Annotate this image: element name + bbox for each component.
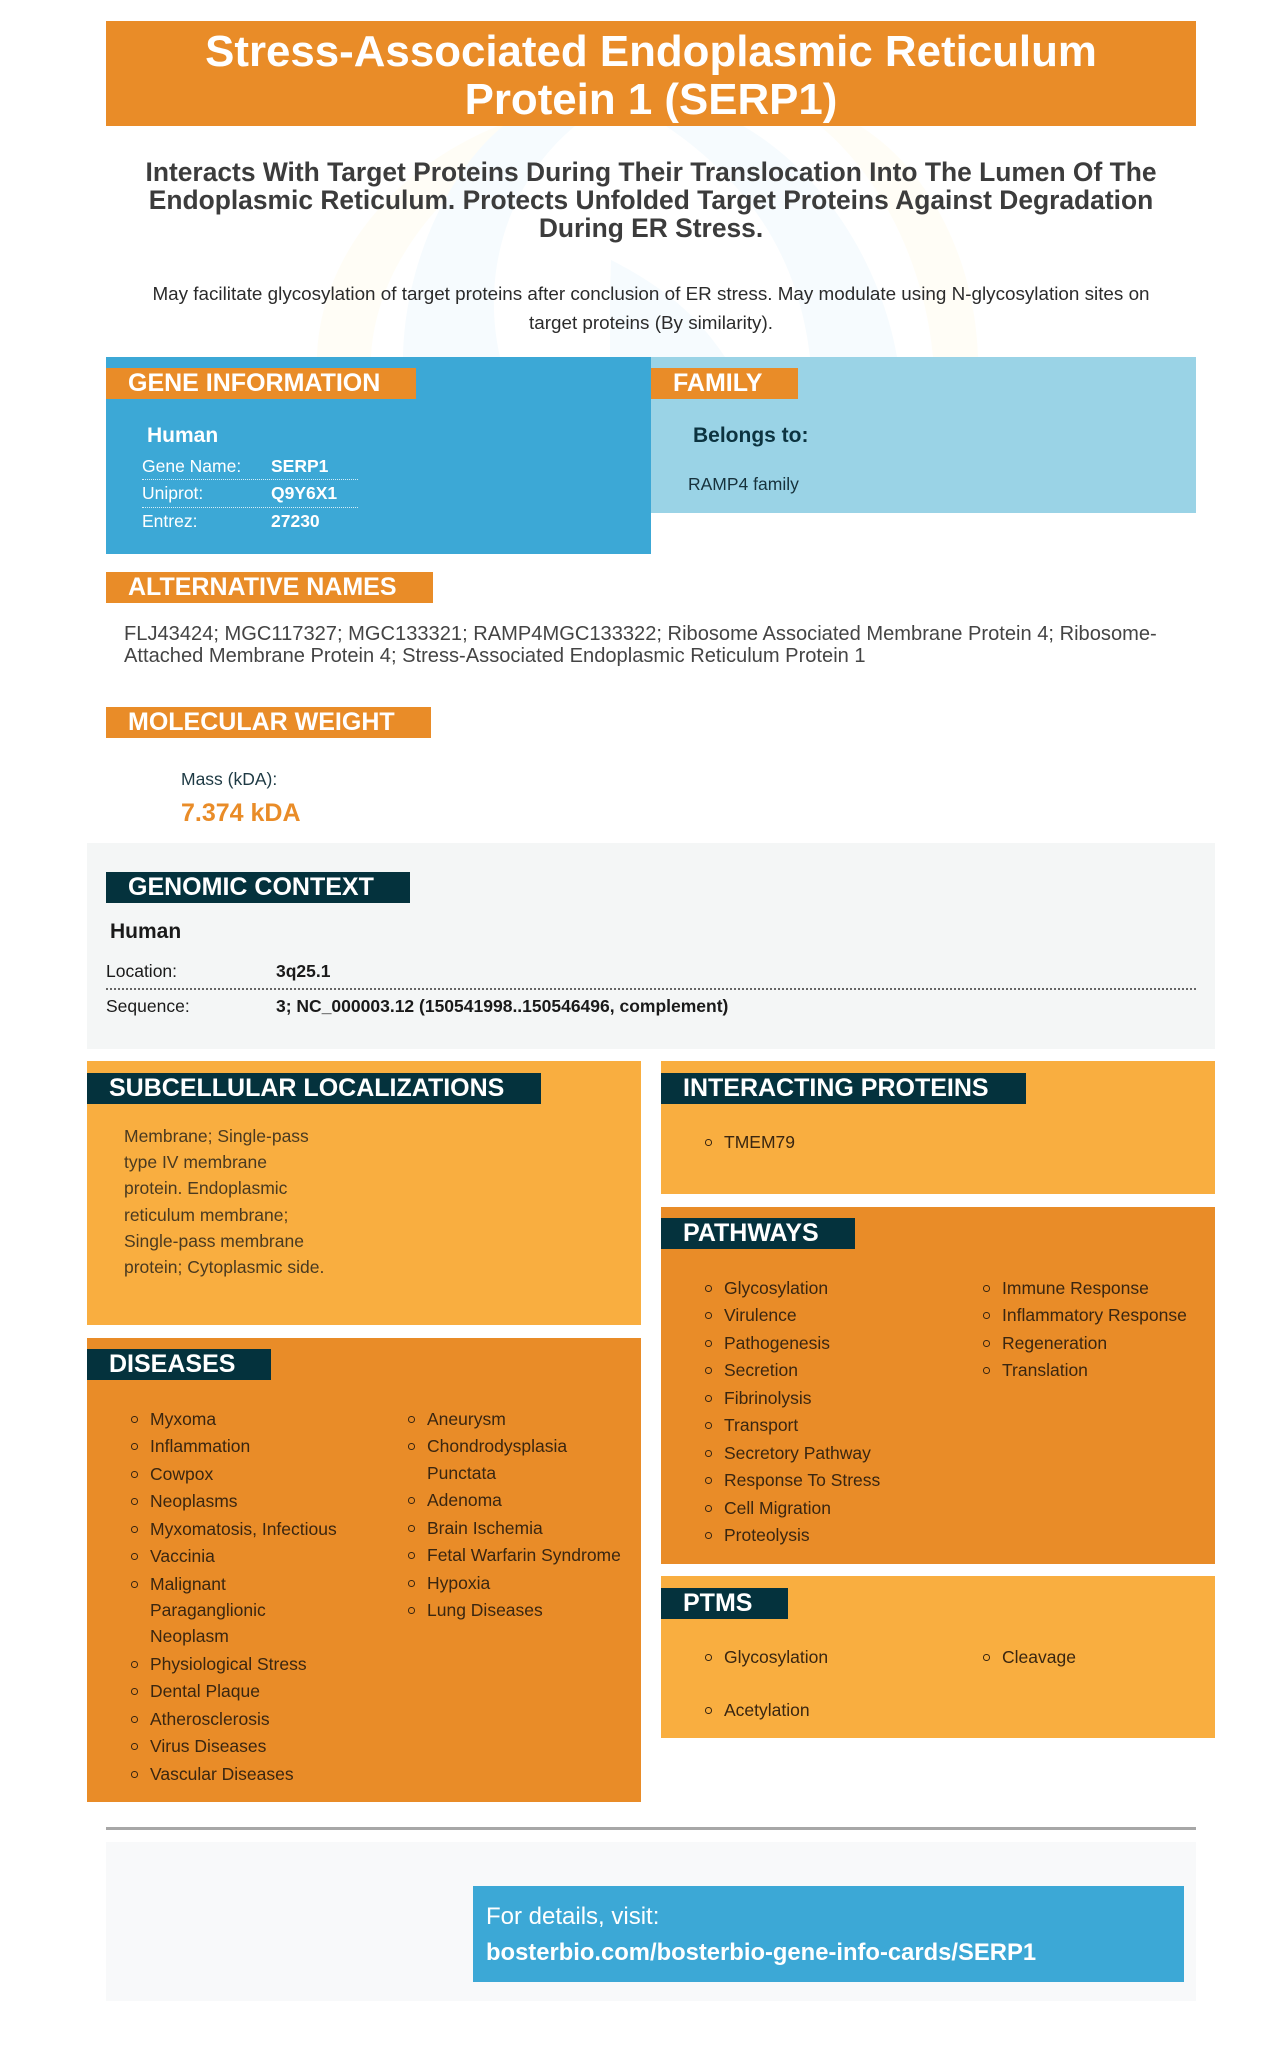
list: pathways column 1: Cell Migration <box>724 1498 831 1518</box>
localization text: reticulum membrane; <box>124 1205 288 1225</box>
list: diseases column 1: Dental Plaque <box>150 1681 260 1701</box>
list: diseases column 1: Atherosclerosis <box>150 1709 270 1729</box>
family value: RAMP4 family <box>688 474 799 494</box>
alternative names text: Attached Membrane Protein 4; Stress-Associated Endoplasmic Reticulum Protein 1 <box>124 645 866 667</box>
list item: acetylation: Acetylation <box>724 1700 810 1720</box>
list: diseases column 2: Hypoxia <box>427 1573 490 1593</box>
gene data table: Entrez: <box>142 511 197 531</box>
list: pathways column 1: Secretory Pathway <box>724 1443 871 1463</box>
heading: PTMs <box>661 1588 788 1619</box>
heading: family <box>651 368 798 399</box>
subtitle function summary: Endoplasmic Reticulum. Protects Unfolded Target Proteins Against Degradation <box>149 185 1153 215</box>
list: pathways column 1 <box>705 1278 880 1545</box>
list: pathways column 2: Inflammatory Response <box>1002 1305 1187 1325</box>
description paragraph: target proteins (By similarity). <box>529 312 773 333</box>
list: diseases column 1: Neoplasms <box>150 1491 238 1511</box>
panel: PTMs <box>661 1576 1215 1738</box>
callout intro text: For details, visit: <box>486 1903 659 1930</box>
list: pathways column 1: Response To Stress <box>724 1470 880 1490</box>
callout url: bosterbio.com/bosterbio-gene-info-cards/SERP1 <box>486 1939 1036 1966</box>
species label: Human <box>147 424 218 447</box>
location row <box>106 961 330 981</box>
panel: family <box>651 357 1196 513</box>
gene data table: Q9Y6X1 <box>271 483 337 503</box>
list: diseases column 1: Myxomatosis, Infectious <box>150 1519 337 1539</box>
background watermark logo <box>317 126 978 357</box>
heading: family: FAMILY <box>673 369 762 397</box>
list: diseases column 1: Malignant <box>150 1574 226 1594</box>
list: diseases column 1: Vascular Diseases <box>150 1764 294 1784</box>
list: diseases column 1 <box>131 1409 337 1784</box>
location row: Location: <box>106 961 177 981</box>
list item: cleavage: Cleavage <box>1002 1647 1076 1667</box>
sequence row: Sequence: <box>106 996 190 1016</box>
mass value: 7.374 kDA <box>181 799 301 827</box>
gene data table: Gene Name: <box>142 456 241 476</box>
list: diseases column 1: Virus Diseases <box>150 1736 266 1756</box>
sequence row: 3; NC_000003.12 (150541998..150546496, complement) <box>276 996 728 1016</box>
list: pathways column 1: Pathogenesis <box>724 1333 830 1353</box>
species label: Human <box>110 920 181 943</box>
heading: alternative names: ALTERNATIVE NAMES <box>128 573 397 601</box>
list item: TMEM79: TMEM79 <box>724 1132 795 1152</box>
panel: subcellular localizations <box>87 1061 641 1325</box>
title banner <box>106 21 1196 126</box>
list: diseases column 1: Myxoma <box>150 1409 216 1429</box>
list: diseases column 2 <box>408 1409 621 1620</box>
list: diseases column 2: Brain Ischemia <box>427 1518 543 1538</box>
title banner: Protein 1 (SERP1) <box>465 75 837 124</box>
panel: genomic context <box>87 843 1215 1049</box>
list: diseases column 1: Cowpox <box>150 1464 213 1484</box>
localization text: Membrane; Single-pass <box>124 1126 309 1146</box>
localization text: Single-pass membrane <box>124 1231 304 1251</box>
list: pathways column 1: Transport <box>724 1415 798 1435</box>
list: diseases column 2: Aneurysm <box>427 1409 506 1429</box>
localization text: protein; Cytoplasmic side. <box>124 1257 324 1277</box>
heading: interacting proteins: INTERACTING PROTEINS <box>683 1074 989 1102</box>
list: pathways column 2: Translation <box>1002 1360 1088 1380</box>
panel: gene information <box>106 357 651 554</box>
list: pathways column 2 <box>983 1278 1187 1380</box>
list: pathways column 1: Glycosylation <box>724 1278 828 1298</box>
heading: pathways <box>661 1218 855 1249</box>
heading: pathways: PATHWAYS <box>683 1219 819 1247</box>
list: pathways column 1: Virulence <box>724 1305 797 1325</box>
description paragraph <box>152 283 1150 333</box>
mass label: Mass (kDA): <box>181 769 277 789</box>
list: diseases column 2: Lung Diseases <box>427 1600 543 1620</box>
list: diseases column 2: Chondrodysplasia <box>427 1436 567 1456</box>
belongs to label: Belongs to: <box>693 424 808 447</box>
list: diseases column 1: Vaccinia <box>150 1546 215 1566</box>
list: pathways column 2: Immune Response <box>1002 1278 1149 1298</box>
gene data table: SERP1 <box>271 456 328 476</box>
heading: diseases: DISEASES <box>109 1350 235 1378</box>
heading: genomic context: GENOMIC CONTEXT <box>128 873 374 901</box>
callout: details link <box>473 1886 1184 1982</box>
list: diseases column 1: Neoplasm <box>150 1626 229 1646</box>
heading: molecular weight: MOLECULAR WEIGHT <box>128 708 395 736</box>
alternative names text: FLJ43424; MGC117327; MGC133321; RAMP4MGC133322; Ribosome Associated Membrane Protein 4; Ribosome- <box>124 623 1157 645</box>
alternative names text <box>124 623 1157 667</box>
panel: pathways <box>661 1207 1215 1564</box>
list: pathways column 1: Proteolysis <box>724 1525 810 1545</box>
list: pathways column 1: Fibrinolysis <box>724 1388 812 1408</box>
localization text: protein. Endoplasmic <box>124 1178 287 1198</box>
list: pathways column 2: Regeneration <box>1002 1333 1107 1353</box>
location row: 3q25.1 <box>276 961 330 981</box>
list: diseases column 1: Paraganglionic <box>150 1600 266 1620</box>
gene data table <box>142 456 358 531</box>
list: pathways column 1: Secretion <box>724 1360 798 1380</box>
subtitle function summary: Interacts With Target Proteins During Their Translocation Into The Lumen Of The <box>146 157 1156 187</box>
panel: diseases <box>87 1338 641 1802</box>
list: diseases column 2: Punctata <box>427 1463 496 1483</box>
subtitle function summary: During ER Stress. <box>539 213 763 243</box>
gene data table: Uniprot: <box>142 483 203 503</box>
localization text <box>124 1126 324 1277</box>
subtitle function summary <box>146 157 1156 243</box>
title banner: Stress-Associated Endoplasmic Reticulum <box>205 27 1097 76</box>
heading: diseases <box>87 1349 271 1380</box>
panel: footer <box>106 1842 1196 2001</box>
list: diseases column 1: Physiological Stress <box>150 1654 307 1674</box>
list: diseases column 1: Inflammation <box>150 1436 250 1456</box>
list item: glycosylation: Glycosylation <box>724 1647 828 1667</box>
heading: PTMs: PTMS <box>683 1589 752 1617</box>
localization text: type IV membrane <box>124 1152 267 1172</box>
heading: subcellular localizations: SUBCELLULAR LOCALIZATIONS <box>109 1074 504 1102</box>
list: diseases column 2: Adenoma <box>427 1490 502 1510</box>
description paragraph: May facilitate glycosylation of target proteins after conclusion of ER stress. May modulate using N-glycosylation sites on <box>152 283 1150 304</box>
heading: gene information: GENE INFORMATION <box>128 369 380 397</box>
gene data table: 27230 <box>271 511 320 531</box>
panel: interacting proteins <box>661 1061 1215 1194</box>
list: diseases column 2: Fetal Warfarin Syndrome <box>427 1545 621 1565</box>
